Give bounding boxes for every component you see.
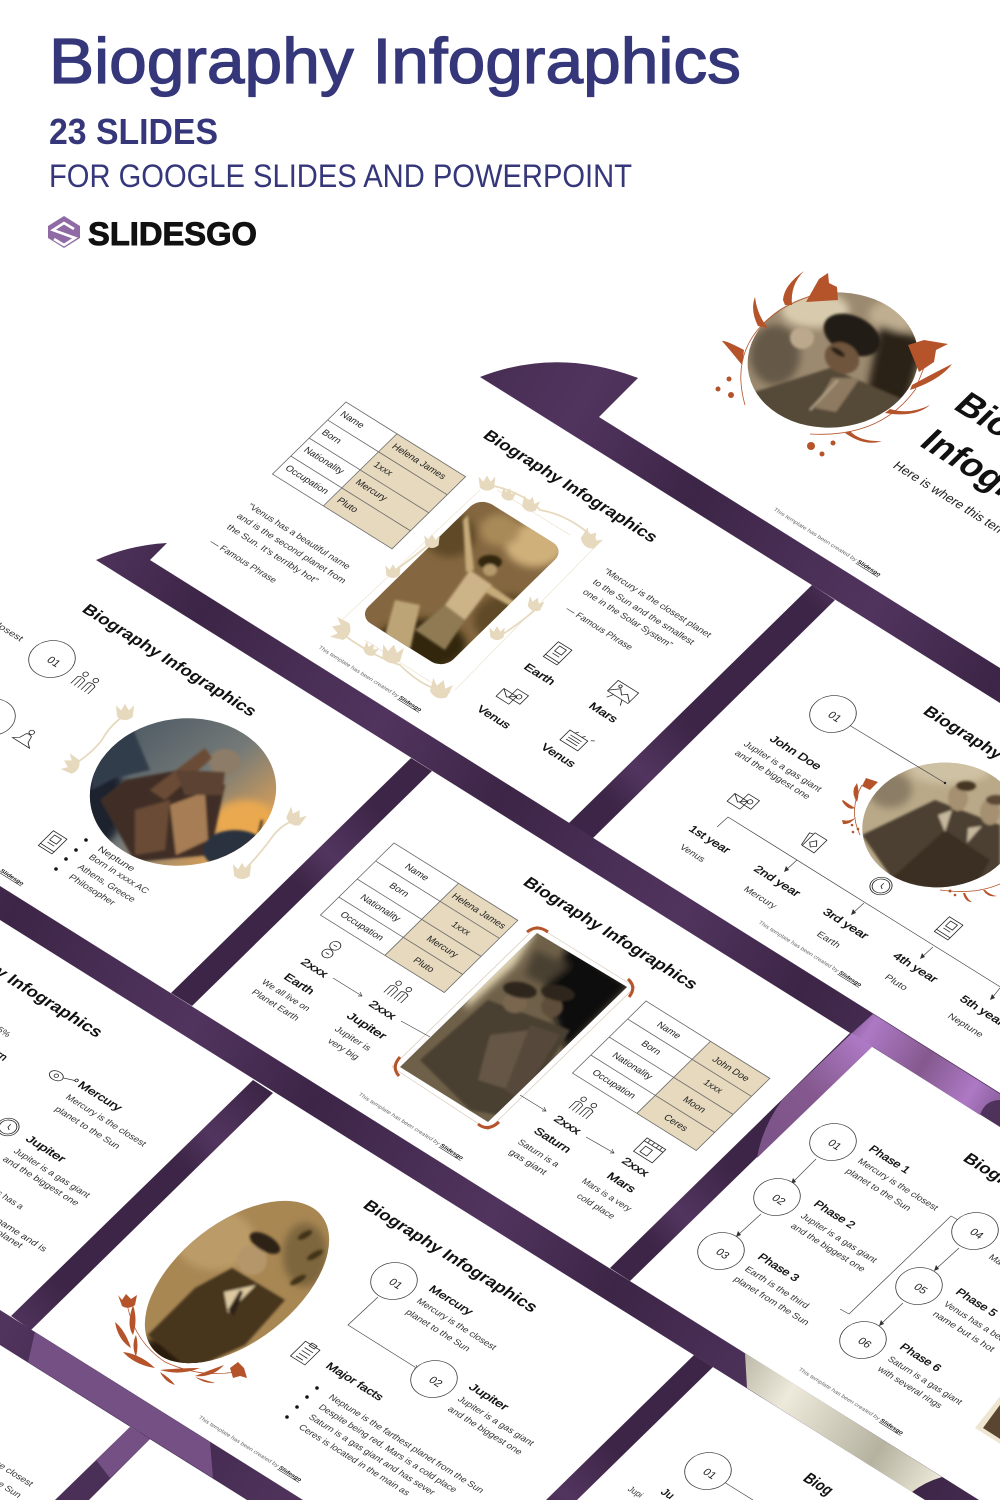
item: Jupiter: and the biggest one: [1, 1154, 81, 1208]
text: John Doe: John Doe: [767, 734, 824, 772]
quote: Venus: [208, 501, 353, 585]
panel: Helena James quotes slide: [208, 402, 714, 770]
item: Mercury: [404, 1284, 499, 1353]
timeline item: Earth: [250, 940, 343, 1022]
bullet list: facts: [285, 1386, 486, 1498]
table: Name: [337, 410, 367, 431]
timeline item: Jupiter: Jupiter: [344, 1011, 389, 1042]
footer credit: This template has been created by Slidesgo: [797, 1367, 905, 1436]
phase circles: 02: [769, 1193, 788, 1208]
table: Helena James: [389, 442, 449, 482]
panel: planets list slide: [0, 922, 149, 1254]
arrow: Saturn to Mars: [586, 1137, 614, 1153]
table right: Occupation: [589, 1068, 638, 1101]
panel: couple slide: [250, 843, 770, 1221]
arrow: Jupiter to photo: [401, 1021, 430, 1037]
quote: Venus: the Sun. It’s terribly hot”: [225, 522, 321, 585]
table left: Name: [402, 862, 431, 883]
slide title: Biography Infographics: [359, 1197, 542, 1316]
cream band accent: [745, 1353, 942, 1492]
arrow: Earth to Jupiter: [333, 978, 362, 996]
phase 6 text: Saturn is a gas giant: [886, 1354, 965, 1407]
phase 2 text: Jupiter is a gas giant: [799, 1211, 880, 1265]
slide title: Biography Infographics: [479, 427, 662, 546]
connector and steps: 01: [386, 1277, 405, 1292]
phase connectors: [736, 1159, 960, 1326]
slide title: Biography Infographics: [78, 601, 261, 720]
table: Born: [319, 428, 344, 446]
timeline item: Earth: 2xxx: [298, 957, 331, 980]
table left: Nationality: [357, 893, 403, 924]
quote: Mercury: [564, 566, 714, 652]
icon and label: Venus second: [538, 727, 595, 770]
timeline icons: [727, 789, 963, 940]
icon and label: Venus: [474, 684, 528, 731]
phase circles: [688, 1116, 1000, 1366]
phase 1 text: Phase 1: [866, 1144, 913, 1176]
subtitle: platforms: FOR GOOGLE SLIDES AND POWERPOINT: [49, 158, 632, 194]
timeline labels: [678, 824, 1000, 1039]
icon and label: Mars: [586, 680, 639, 725]
timeline labels: 5th year: [957, 994, 1000, 1028]
lavender band accents: [28, 1014, 1000, 1478]
phase circles: 06: [855, 1336, 874, 1351]
couple photo: [400, 933, 627, 1122]
timeline item: Earth: Planet Earth: [250, 987, 302, 1022]
timeline item: Jupiter: Jupiter is: [333, 1024, 374, 1053]
phase 6 text: Phase 6: [897, 1342, 944, 1374]
text: John Doe: Jupiter is a gas giant: [742, 739, 825, 794]
panel: bottom slide fragment: [626, 1445, 837, 1500]
photo frame with orange corners: [392, 926, 635, 1130]
timeline item: Saturn: Saturn is a: [516, 1137, 562, 1169]
item: Mercury: planet to the Sun: [53, 1104, 122, 1151]
phase 6 text: [875, 1342, 965, 1410]
item: Jupiter: [0, 1115, 93, 1208]
bullet list: facts: Ceres is located in the main as: [297, 1422, 413, 1498]
quote: Mercury: “Mercury is the closest planet: [602, 566, 714, 639]
icon and label: Venus: Venus: [474, 704, 513, 731]
item: Jupiter: Jupiter is a gas giant: [456, 1394, 537, 1448]
icon: yoga: [13, 725, 42, 748]
panel: cover slide: [716, 271, 1000, 578]
item: Jupiter: Jupiter is a gas giant: [12, 1146, 93, 1200]
icon: book: [38, 831, 67, 854]
icon and label: Earth: [521, 642, 572, 688]
timeline item: Mars: 2xxx: [619, 1156, 652, 1179]
timeline labels: Earth: [815, 929, 843, 950]
icon and label: Earth: Earth: [521, 662, 557, 688]
phase circles: 05: [911, 1282, 930, 1297]
table left: Occupation: [337, 910, 386, 943]
decoration: orange wreath: [115, 1294, 247, 1385]
step circle 01 with connector: 01: [825, 710, 844, 725]
decoration: orange floral wreath: [716, 271, 952, 456]
quote: Mercury: to the Sun and the smallest: [591, 577, 697, 647]
timeline item: Saturn: gas giant: [507, 1147, 550, 1177]
bullet list: Neptune: [96, 844, 137, 873]
bullet list: Born in xxxx AC: [87, 852, 152, 896]
table: Nationality: [301, 445, 347, 477]
table right: Ceres: [661, 1113, 690, 1134]
table right: Nationality: [609, 1051, 655, 1082]
timeline item: Jupiter: 2xxx: [366, 999, 399, 1022]
logo: Slidesgo: SLIDESGO: [88, 216, 257, 252]
timeline labels: 1st year: [686, 824, 733, 856]
two men photo: [862, 762, 1000, 888]
text: John Doe: [733, 734, 825, 801]
table right: 1xxx: [700, 1078, 725, 1096]
footer credit: This template has been created by Slidesgo: [357, 1092, 465, 1161]
phase 6 text: with several rings: [875, 1364, 945, 1410]
timeline item: Saturn: Saturn: [531, 1126, 573, 1155]
table left: [320, 843, 518, 992]
timeline labels: Venus: [678, 842, 708, 864]
step circle 01 with connector: [800, 688, 946, 784]
bullet list: facts: Saturn is a gas giant and has sever: [307, 1412, 438, 1497]
table: Pluto: [334, 496, 360, 515]
timeline item: Mars: Mars: [604, 1171, 638, 1195]
quote: Venus: “Venus has a beautiful name: [246, 501, 353, 571]
text: Jupiter body: Jupi: [626, 1484, 645, 1499]
timeline item: Saturn: [507, 1095, 599, 1177]
footer credit: This template has been created by Slidesgo: [772, 507, 882, 578]
phase 5 text: name but is hot: [931, 1309, 998, 1354]
table right: John Doe: [709, 1055, 752, 1084]
footer credit: This template has been created by Slidesgo: [317, 645, 423, 713]
icon and label: Mars: Mars: [586, 701, 620, 725]
step circle 01: 01: [44, 655, 63, 670]
icon: clipboard: [291, 1340, 321, 1365]
table: [272, 402, 466, 549]
timeline item: Mars: Mars is a very: [580, 1176, 635, 1213]
phase 5 text: Phase 5: [953, 1287, 1000, 1319]
item: Mercury: Mercury: [75, 1080, 125, 1114]
timeline item: Mars: [575, 1138, 666, 1221]
item: Jupiter: [446, 1382, 537, 1456]
timeline item: Saturn: 2xxx: [551, 1114, 584, 1137]
slide title: Biography Infographics: [519, 874, 702, 993]
timeline item: Earth: Earth: [281, 972, 317, 997]
statue photo: [90, 718, 276, 866]
footer credit: This template has been created by Slidesgo: [757, 920, 863, 988]
quote: Mercury: one in the Solar System”: [581, 587, 675, 649]
bullet list: Athens, Greece: [76, 862, 138, 904]
phase 2 text: and the biggest one: [789, 1221, 868, 1273]
table left: Born: [386, 881, 411, 899]
phase circles: 01: [825, 1138, 844, 1153]
item: Mercury: [47, 1066, 149, 1151]
table left: 1xxx: [448, 920, 473, 938]
icon and label: Venus second: Venus: [538, 742, 578, 770]
bullet list: Philosopher: [67, 872, 118, 907]
table right: Born: [638, 1039, 663, 1057]
heading: major facts: Major facts: [323, 1361, 386, 1403]
portrait photo: [144, 1200, 330, 1364]
quote: Venus: and is the second planet from: [235, 511, 349, 585]
panel: John Doe timeline slide: [678, 688, 1000, 1039]
bullet list: facts: Despite being red, Mars is a cold place: [317, 1402, 459, 1494]
icon: runners: [71, 670, 101, 694]
panel: bottom left slide fragment: [0, 1432, 36, 1500]
step circle 01: [675, 1445, 753, 1500]
timeline labels: 4th year: [890, 951, 940, 985]
timeline labels: Pluto: [883, 972, 910, 992]
phase 2 text: Phase 2: [811, 1199, 858, 1231]
text: John Doe: and the biggest one: [733, 748, 813, 801]
panel: statue slide: [0, 580, 307, 907]
table right: [572, 1001, 770, 1150]
item: Mercury: Mercury is the closest: [415, 1296, 499, 1352]
table right: Moon: [680, 1095, 708, 1115]
arrow: photo to Saturn: [520, 1095, 546, 1111]
quote: Venus: — Famous Phrase: [208, 537, 279, 585]
connector and steps: 02: [426, 1375, 445, 1390]
footer credit: This template has been created by Slidesgo: [197, 1415, 303, 1483]
timeline item: Jupiter: [326, 979, 414, 1061]
timeline item: Jupiter: very big: [326, 1036, 362, 1061]
title: Biography Infographics: [49, 25, 741, 97]
step circle 01: [19, 633, 85, 685]
table left: Pluto: [410, 956, 437, 975]
item: Venus fragment: [0, 1177, 50, 1254]
table: Mercury: [353, 478, 390, 504]
decoration: orange sprigs: [842, 778, 1000, 902]
item: Jupiter: Jupiter: [23, 1134, 68, 1165]
item: Mercury: planet to the Sun: [404, 1307, 473, 1353]
phase 1 text: [844, 1144, 941, 1213]
table left: Helena James: [449, 891, 508, 931]
panel: portrait man slide: [115, 1195, 542, 1498]
item: Mercury: Mercury: [426, 1284, 476, 1318]
phase 3 text: Earth is the third: [743, 1264, 812, 1310]
bullet list: facts: Neptune is the farthest planet from the Sun: [327, 1392, 486, 1495]
phase 3 text: [732, 1252, 812, 1327]
step circle 01: 01: [700, 1467, 719, 1482]
table: 1xxx: [371, 460, 395, 478]
timeline labels: 3rd year: [820, 907, 871, 942]
decoration: beige sprigs: [60, 704, 307, 879]
table right: Name: [654, 1020, 683, 1041]
table: Occupation: [282, 463, 331, 497]
table left: Mercury: [424, 934, 461, 960]
phase 2 text: [789, 1199, 880, 1273]
phase 1 text: planet to the Sun: [844, 1166, 913, 1213]
timeline labels: Mercury: [742, 884, 780, 911]
subtitle: slide count: 23 SLIDES: [49, 111, 218, 152]
decoration: beige floral frame: [329, 476, 604, 701]
panel: phases slide: [688, 1116, 1000, 1450]
phase circles: 04: [967, 1227, 986, 1242]
dancer photo: [364, 502, 558, 664]
phase 3 text: Phase 3: [755, 1252, 802, 1284]
phase 5 text: [931, 1287, 1000, 1354]
step circle 02: [0, 691, 25, 743]
connector and steps: [348, 1255, 467, 1405]
small framed photo: [975, 1390, 1000, 1450]
quote: Mercury: — Famous Phrase: [564, 604, 635, 652]
timeline item: Earth: We all live on: [260, 977, 313, 1013]
timeline item: Mars: cold place: [575, 1191, 617, 1221]
timeline labels: Neptune: [946, 1011, 986, 1039]
bullet list: [54, 838, 152, 907]
item: Jupiter: and the biggest one: [446, 1404, 525, 1456]
cover photo: woman with hat: [748, 292, 918, 428]
timeline: [717, 817, 1000, 1000]
phase 3 text: planet from the Sun: [732, 1274, 812, 1327]
item: Jupiter: Jupiter: [466, 1382, 511, 1413]
phase 1 text: Mercury is the closest: [856, 1156, 941, 1212]
timeline labels: 2nd year: [751, 864, 803, 899]
item: Mercury: Mercury is the closest: [64, 1092, 149, 1148]
phase circles: 03: [713, 1247, 732, 1262]
purple slide frame bands: [0, 362, 1000, 1500]
